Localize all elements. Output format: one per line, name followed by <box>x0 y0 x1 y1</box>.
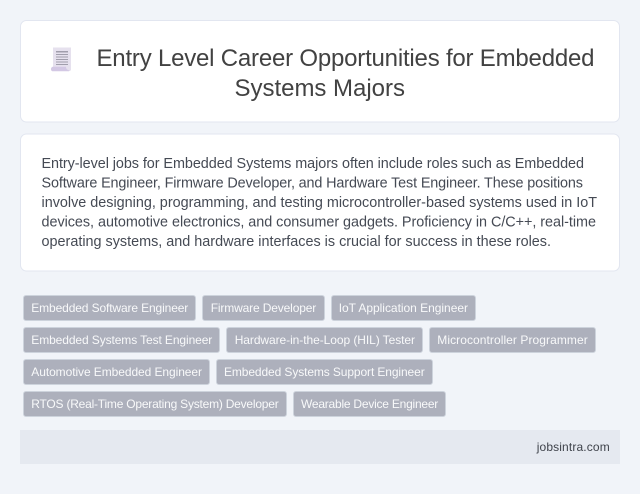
tag: Embedded Systems Test Engineer: Embedded Systems Test Engineer <box>31 333 212 347</box>
tag: Microcontroller Programmer <box>430 328 596 352</box>
tag: Embedded Software Engineer <box>24 296 196 320</box>
title <box>96 45 594 102</box>
tag: Wearable Device Engineer: Wearable Device Engineer <box>301 397 438 411</box>
tag: RTOS (Real-Time Operating System) Developer <box>24 392 286 416</box>
footer <box>20 430 620 464</box>
tag: Hardware-in-the-Loop (HIL) Tester <box>226 328 422 352</box>
tag: Embedded Software Engineer: Embedded Software Engineer <box>31 301 188 315</box>
tag: Embedded Systems Support Engineer <box>216 360 432 384</box>
tag: RTOS (Real-Time Operating System) Developer: RTOS (Real-Time Operating System) Developer <box>31 397 279 411</box>
tag: Microcontroller Programmer: Microcontroller Programmer <box>437 333 588 347</box>
tag: Embedded Systems Test Engineer <box>24 328 220 352</box>
tag: IoT Application Engineer: IoT Application Engineer <box>339 301 468 315</box>
text block: description: devices, automotive electronics, and consumer gadgets. Proficiency in C/C++, real-time <box>42 214 596 230</box>
text block: description <box>42 156 597 250</box>
title: Systems Majors <box>234 75 405 102</box>
tag: Automotive Embedded Engineer <box>24 360 210 384</box>
text block: description: involve designing, programming, and testing microcontroller-based systems used in IoT <box>42 195 597 211</box>
panel: description <box>20 134 620 271</box>
panel: header <box>20 20 620 122</box>
title: Entry Level Career Opportunities for Embedded <box>96 45 594 72</box>
tag: Automotive Embedded Engineer: Automotive Embedded Engineer <box>31 365 202 379</box>
text block: description: Software Engineer, Firmware Developer, and Hardware Test Engineer. These positions <box>42 176 583 192</box>
tag: Wearable Device Engineer <box>294 392 446 416</box>
text block: description: operating systems, and hardware interfaces is crucial for success in these roles. <box>42 234 551 250</box>
tag: Embedded Systems Support Engineer: Embedded Systems Support Engineer <box>224 365 425 379</box>
tag: Firmware Developer: Firmware Developer <box>211 301 316 315</box>
tag: Hardware-in-the-Loop (HIL) Tester: Hardware-in-the-Loop (HIL) Tester <box>235 333 415 347</box>
tag: Firmware Developer <box>202 296 324 320</box>
text block: description: Entry-level jobs for Embedded Systems majors often include roles such as Embedded <box>42 156 584 172</box>
tag: IoT Application Engineer <box>332 296 476 320</box>
icon: receipt scroll <box>51 48 71 71</box>
footer source text: jobsintra.com <box>536 440 610 454</box>
panel: job role tags <box>24 296 596 416</box>
